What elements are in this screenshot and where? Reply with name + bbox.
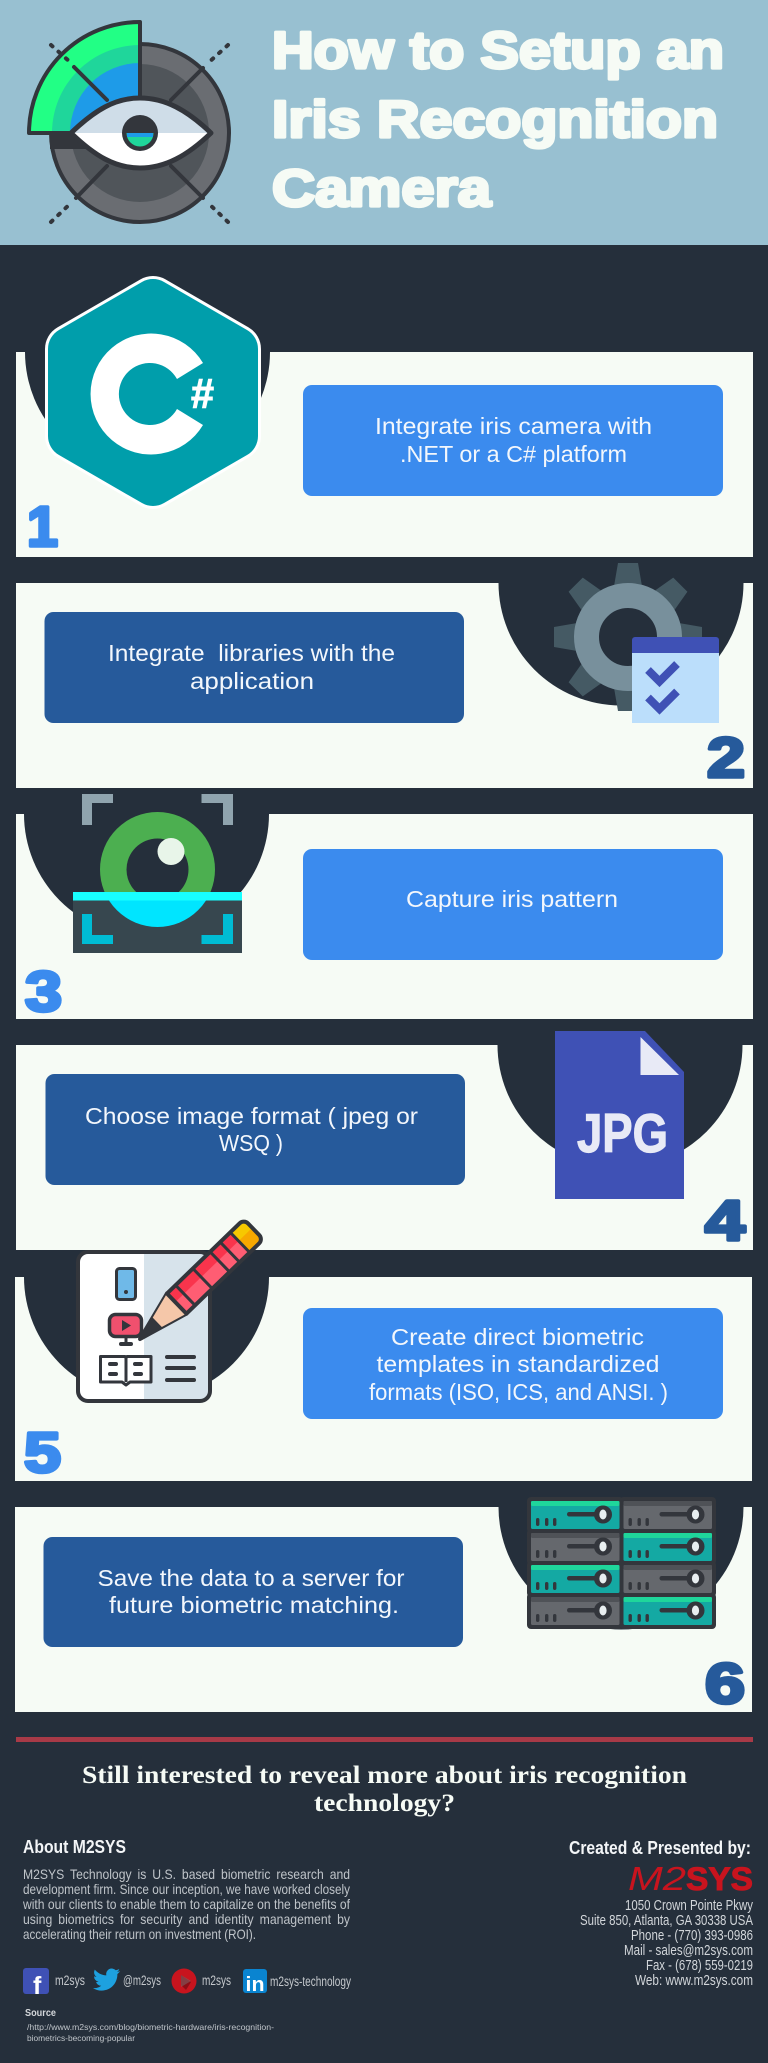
title: Camera — [272, 160, 492, 218]
title — [272, 22, 724, 218]
source — [25, 2007, 274, 2043]
number 5: 5 — [24, 1421, 61, 1485]
panel: step 3 — [16, 794, 753, 1024]
text box: step 4: Choose image format ( jpeg or — [85, 1103, 418, 1129]
text box: step 6: future biometric matching. — [109, 1592, 399, 1618]
text box: step 4 — [46, 1074, 465, 1185]
closing heading: Still interested to reveal more about iris recognition — [82, 1762, 687, 1789]
title: Iris Recognition — [272, 91, 718, 149]
panel: step 4 — [16, 1031, 753, 1253]
source: /http://www.m2sys.com/blog/biometric-hardware/iris-recognition- — [27, 2022, 274, 2032]
about M2SYS — [22, 1837, 350, 1942]
icon: facebook: f — [33, 1972, 42, 2000]
icon: iris scan — [73, 794, 242, 953]
icon: linkedin — [243, 1969, 267, 1996]
icon: C# hexagon: # — [191, 370, 214, 417]
text box: step 5: templates in standardized — [376, 1351, 660, 1377]
text box: step 4: WSQ ) — [219, 1130, 283, 1156]
text box: step 1 — [303, 385, 723, 496]
source: biometrics-becoming-popular — [27, 2033, 135, 2043]
source: Source — [25, 2007, 56, 2019]
closing heading — [82, 1762, 687, 1817]
icon: document and pencil — [78, 1219, 263, 1401]
number 6: 6 — [705, 1652, 745, 1716]
number 3: 3 — [25, 960, 62, 1024]
text box: step 3 — [303, 849, 723, 960]
panel: step 1 — [16, 301, 753, 559]
icon: server rack — [527, 1497, 716, 1629]
number 2: 2 — [707, 726, 745, 790]
text box: step 2: Integrate libraries with the — [108, 640, 395, 666]
panel: step 6 — [15, 1497, 752, 1716]
social links: m2sys — [55, 1973, 85, 1988]
M2SYS logo: SYS — [686, 1861, 753, 1897]
icon: C# hexagon — [70, 301, 236, 484]
social links: m2sys — [202, 1973, 231, 1988]
divider bar — [16, 1737, 753, 1742]
text box: step 5 — [303, 1308, 723, 1419]
text box: step 3: Capture iris pattern — [406, 886, 618, 912]
address — [580, 1898, 754, 1989]
text box: step 5: formats (ISO, ICS, and ANSI. ) — [369, 1379, 668, 1405]
icon: video channel — [172, 1968, 196, 1994]
text box: step 6 — [44, 1537, 463, 1647]
text box: step 2 — [44, 612, 464, 723]
number 4: 4 — [705, 1189, 745, 1253]
M2SYS logo — [628, 1860, 753, 1897]
icon: facebook — [23, 1968, 49, 2000]
about M2SYS: M2SYS Technology is U.S. based biometric research and — [23, 1866, 350, 1882]
panel: step 5 — [15, 1219, 752, 1485]
title: How to Setup an — [272, 22, 724, 80]
created and presented by — [569, 1838, 754, 1989]
closing heading: technology? — [314, 1790, 455, 1817]
about M2SYS: development firm. Since our inception, we have worked closely — [23, 1881, 350, 1897]
number 1: 1 — [27, 495, 58, 559]
social links — [23, 1968, 351, 2000]
text box: step 1: .NET or a C# platform — [400, 441, 627, 467]
about M2SYS: accelerating their return on investment (ROI). — [23, 1926, 256, 1942]
icon: iris scanner eye — [29, 22, 229, 222]
text box: step 6: Save the data to a server for — [98, 1565, 405, 1591]
text box: step 5: Create direct biometric — [391, 1324, 644, 1350]
icon: twitter — [93, 1969, 120, 1991]
icon: JPG file — [555, 1031, 684, 1199]
text box: step 2: application — [190, 668, 314, 694]
social links: @m2sys — [123, 1973, 161, 1988]
text box: step 1: Integrate iris camera with — [375, 413, 652, 439]
about M2SYS: using biometrics for security and identity management by — [23, 1911, 350, 1927]
icon: linkedin: in — [246, 1974, 264, 1996]
about M2SYS: with our clients to enable them to capitalize on the benefits of — [22, 1896, 350, 1912]
M2SYS logo: M2 — [628, 1860, 686, 1897]
social links: m2sys-technology — [270, 1974, 351, 1989]
header banner — [0, 0, 768, 245]
icon: JPG file: JPG — [577, 1102, 668, 1164]
panel: step 2 — [16, 563, 753, 790]
icon: gear and checklist — [554, 563, 719, 723]
about M2SYS: About M2SYS — [23, 1837, 126, 1857]
